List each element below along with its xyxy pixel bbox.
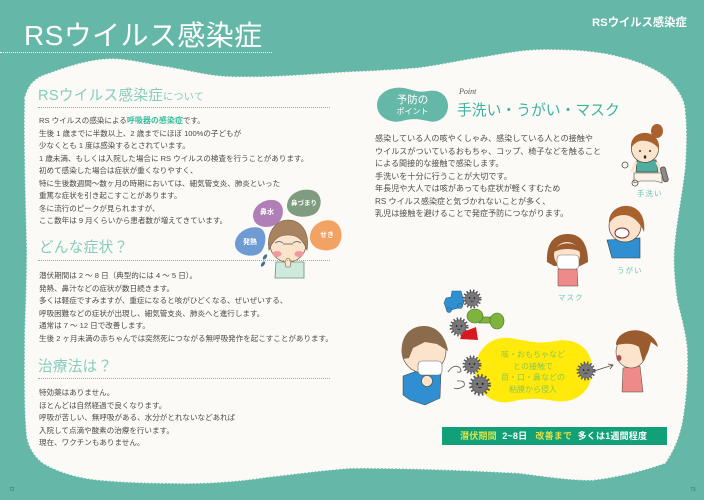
text block: prevention: ウイルスがついているおもちゃ、コップ、椅子などを触ること	[375, 146, 601, 156]
text block: prevention	[375, 134, 601, 218]
infection route text: 咳・おもちゃなど	[501, 350, 565, 359]
virus on car	[464, 291, 480, 307]
badge text: ポイント	[396, 107, 428, 116]
mask	[418, 361, 442, 375]
person cheeks	[272, 251, 304, 257]
text: 鼻水	[260, 209, 274, 216]
incubation bar	[442, 427, 667, 445]
running header: RSウイルス感染症	[592, 17, 687, 29]
text block: treatment	[39, 388, 235, 447]
hair	[402, 326, 448, 359]
illustration: toys and viruses	[444, 291, 504, 340]
symptom bubble: stuffy nose	[287, 190, 321, 217]
text: 発熱	[243, 239, 257, 246]
text block: treatment: 特効薬はありません。	[39, 388, 114, 397]
text block: about RS virus: 特に生後数週間～数ヶ月の時期においては、細気管支炎、肺炎といった	[39, 178, 280, 188]
symptom labels	[243, 199, 334, 246]
text block: prevention: 乳児は接触を避けることで発症予防につながります。	[375, 209, 568, 218]
hair	[616, 330, 658, 362]
infection route text: との接触で	[513, 362, 553, 371]
soap bubbles and bottle	[622, 162, 669, 186]
illustration: coughing child	[402, 326, 464, 405]
mouth	[616, 355, 622, 361]
page number left: 72	[9, 487, 15, 493]
viruses in the air	[464, 357, 594, 394]
infection arrow	[594, 364, 613, 371]
text block: prevention: による間接的な接触で感染します。	[375, 159, 503, 168]
text block: treatment: 入院して点滴や酸素の治療を行います。	[39, 426, 174, 434]
yellow infection route blob	[475, 338, 592, 402]
illustration: child washing hands	[622, 124, 669, 186]
label: gargling: うがい	[617, 266, 642, 275]
text block: prevention: RS ウイルス感染症と気づかれないことが多く、	[375, 196, 550, 206]
badge text: 予防の	[397, 94, 428, 106]
heading: hand washing, gargling, mask: 手洗い・うがい・マスク	[457, 103, 620, 119]
symptom bubble: cough	[310, 220, 342, 250]
text block: symptoms: 潜伏期間は 2 ～ 8 日（典型的には 4 ～ 5 日）。	[39, 271, 197, 280]
symptom illustration: elderly person with symptom bubbles	[235, 190, 342, 278]
text block: about RS virus: 初めて感染した場合は症状が重くなりやすく、	[39, 166, 198, 175]
text block: about RS virus: 少なくとも 1 度は感染するとされています。	[39, 141, 190, 150]
text block: about RS virus: 生後 1 歳までに半数以上、2 歳までにほぼ 100%の子どもが	[39, 128, 241, 138]
infection route text: 粘膜から侵入	[509, 385, 557, 394]
illustration: girl inhaling virus	[616, 330, 658, 392]
legs	[634, 173, 662, 183]
badge text	[396, 94, 428, 116]
toy car	[444, 291, 464, 312]
text: 鼻づまり	[291, 200, 317, 207]
mask	[557, 255, 579, 269]
hair	[547, 234, 588, 266]
text block: about RS virus: RS ウイルスの感染による呼吸器の感染症です。	[39, 116, 205, 125]
text block: symptoms	[39, 271, 333, 342]
text block: symptoms: 通常は 7 ～ 12 日で改善します。	[39, 321, 150, 330]
infection route text: 目・口・鼻などの	[501, 373, 565, 382]
person hands	[285, 258, 291, 267]
symptom bubble: runny nose	[253, 200, 283, 227]
text: せき	[320, 232, 334, 239]
person glasses and eyes	[275, 242, 301, 244]
heading: about RS virus: RSウイルス感染症について	[38, 88, 204, 104]
text block: prevention: 感染している人の咳やくしゃみ、感染している人との接触や	[375, 134, 593, 143]
text block: about RS virus	[39, 116, 308, 225]
text block: prevention: 年長児や大人では咳があっても症状が軽くすむため	[375, 184, 560, 193]
text block: treatment: 現在、ワクチンもありません。	[39, 438, 144, 447]
illustration: child gargling	[607, 206, 644, 258]
illustration: child with mask	[547, 234, 588, 286]
symptom bubble: fever	[235, 227, 265, 256]
prevention points badge	[377, 88, 448, 122]
arms	[632, 162, 661, 172]
person hair	[268, 220, 308, 250]
text block: symptoms: 呼吸困難などの症状が出現し、細気管支炎、肺炎へと進行します。	[39, 308, 264, 318]
face	[639, 150, 651, 159]
text block: symptoms: 多くは軽症ですみますが、重症になると咳がひどくなる、ぜいぜいする、	[39, 296, 287, 305]
text block: symptoms: 発熱、鼻汁などの症状が数日続きます。	[39, 284, 174, 292]
hair	[609, 206, 644, 232]
text block: symptoms: 生後 2 ヶ月未満の赤ちゃんでは突然死につながる無呼吸発作を起こすことがあります。	[39, 334, 333, 342]
incubation bar text: 潜伏期間 2~8日 改善まで 多くは1週間程度	[460, 431, 647, 441]
head	[632, 136, 658, 162]
hand	[422, 376, 432, 386]
virus	[464, 357, 480, 373]
person body	[275, 262, 304, 278]
red block	[460, 327, 478, 340]
body	[558, 269, 578, 286]
head	[616, 336, 646, 368]
hair	[631, 133, 659, 149]
point label: Point	[459, 87, 476, 96]
face	[554, 242, 580, 268]
label: hand washing: 手洗い	[637, 189, 662, 198]
text block: prevention: 手洗いを十分に行うことが大切です。	[375, 172, 512, 180]
body	[607, 238, 640, 258]
body	[636, 160, 658, 172]
label: mask: マスク	[558, 293, 584, 302]
cough lines	[448, 366, 464, 389]
sweat drops	[260, 254, 268, 267]
virus	[578, 363, 594, 379]
text block: about RS virus: 1 歳未満、もしくは入院した場合に RS ウイルスの検査を行うことがあります。	[39, 154, 308, 162]
body	[403, 368, 441, 405]
text block: about RS virus: 重篤な症状を引き起こすことがあります。	[39, 191, 182, 200]
text block: about RS virus: 冬に流行のピークが見られますが、	[39, 204, 160, 212]
dumbbell toy	[467, 309, 504, 329]
page number right: 73	[690, 487, 696, 493]
open mouth	[615, 228, 629, 238]
body	[622, 366, 643, 392]
title: RSウイルス感染症	[24, 20, 262, 51]
infection route text	[501, 350, 565, 394]
heading: symptoms: どんな症状？	[39, 240, 128, 256]
head	[609, 210, 641, 242]
text block: about RS virus: ここ数年は 9 月くらいから患者数が増えてきています。	[39, 216, 227, 225]
head	[402, 329, 446, 373]
person head	[270, 226, 306, 262]
text block: treatment: ほとんどは自然経過で良くなります。	[39, 400, 166, 410]
virus on block	[451, 319, 467, 335]
hair bun	[651, 124, 663, 138]
text block: treatment: 呼吸が苦しい、無呼吸がある、水分がとれないなどあれば	[39, 413, 235, 422]
heading: treatment: 治療法は？	[38, 359, 112, 375]
fringe	[554, 243, 581, 252]
virus	[471, 376, 489, 394]
